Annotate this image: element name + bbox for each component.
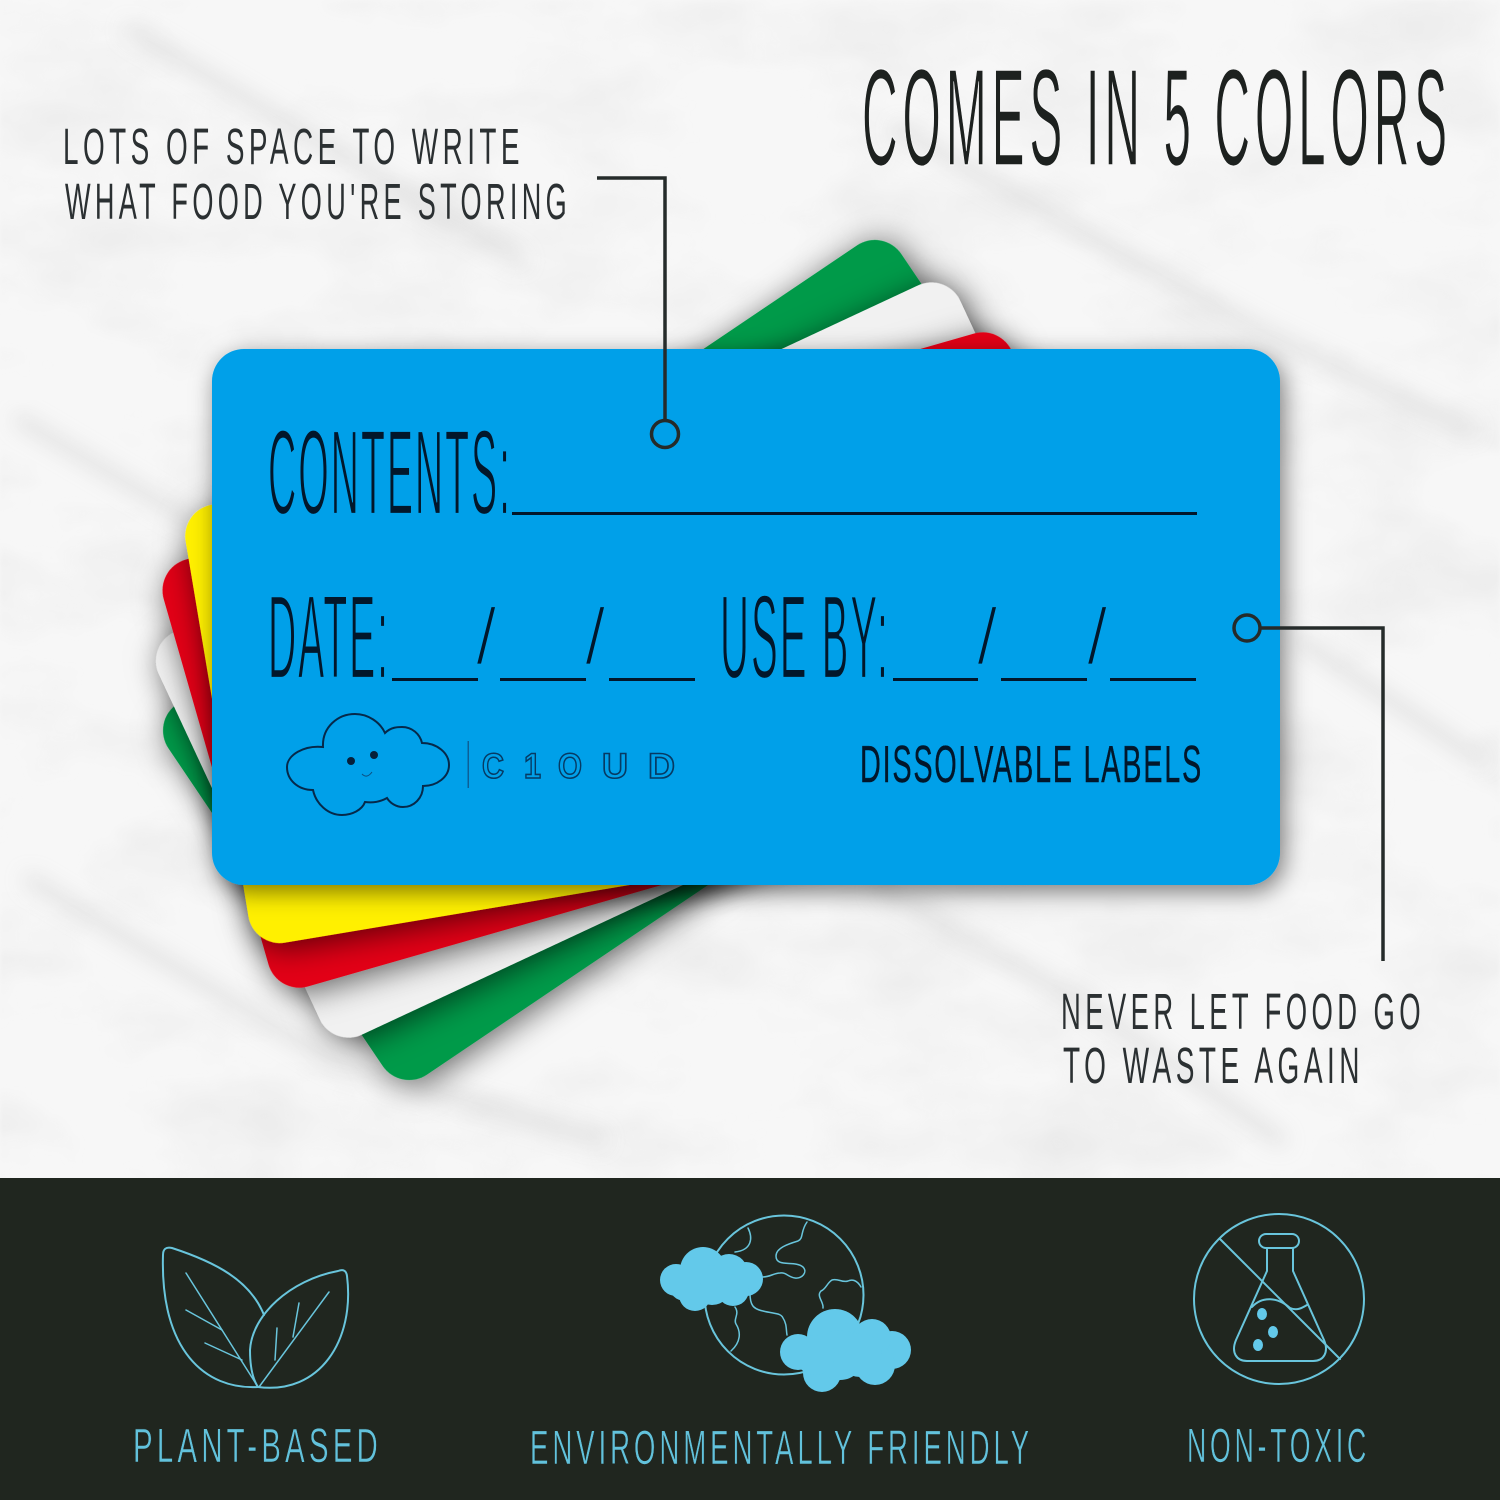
product name: DISSOLVABLE LABELS [860, 736, 1203, 794]
card: white [146, 272, 1134, 1048]
date field: / [476, 592, 500, 681]
icon: cloud logo [287, 714, 469, 815]
brand wordmark: C [482, 747, 504, 786]
callout: space to write: LOTS OF SPACE TO WRITE [63, 118, 524, 175]
icon: left cloud [660, 1247, 763, 1311]
icon: crossed-out flask [1194, 1214, 1364, 1384]
brand wordmark: 1 [524, 747, 541, 786]
brand wordmark: O [558, 747, 582, 786]
icon: right cloud [780, 1309, 911, 1392]
use by field: / [977, 592, 1001, 681]
label: plant-based: PLANT-BASED [133, 1420, 382, 1473]
icon: earth with clouds [660, 1216, 911, 1392]
use by field: USE BY: [720, 571, 890, 704]
contents field: CONTENTS: [268, 404, 512, 540]
icon: leaves [163, 1248, 348, 1388]
use by field: / [1087, 592, 1111, 681]
callout: never waste [1061, 983, 1425, 1094]
date field: DATE: [268, 571, 390, 704]
brand wordmark: U [602, 747, 628, 786]
arrow: space callout leader [597, 178, 678, 448]
panel: benefits band [0, 1178, 1500, 1500]
date field: / [585, 592, 609, 681]
callout: space to write: WHAT FOOD YOU'RE STORING [65, 173, 571, 230]
card: blue main label [212, 349, 1280, 885]
card: red [155, 325, 1127, 995]
brand wordmark [482, 747, 675, 786]
label: environmentally friendly: ENVIRONMENTALLY FRIENDLY [530, 1422, 1033, 1475]
card: yellow [180, 364, 1126, 948]
arrow: waste callout leader [1234, 615, 1383, 961]
callout: space to write [63, 118, 571, 230]
card stack [146, 228, 1280, 1092]
card: green [151, 228, 1133, 1092]
marble background [0, 0, 1500, 1180]
brand wordmark: D [648, 747, 675, 786]
